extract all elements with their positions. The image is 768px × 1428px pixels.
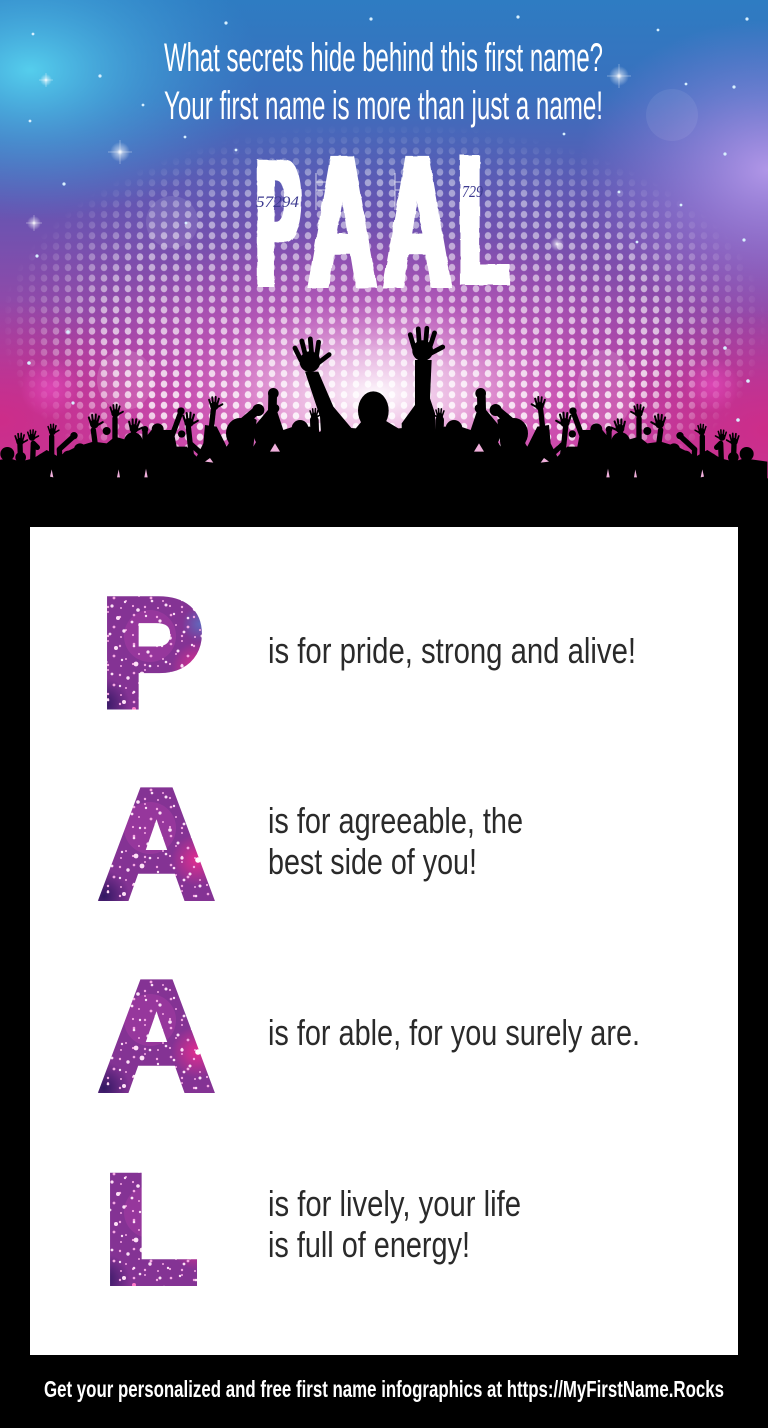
description A first: best side of you! — [268, 841, 477, 882]
crowd silhouette — [0, 328, 768, 528]
sparkles — [26, 15, 750, 422]
description P: is for pride, strong and alive! — [268, 630, 636, 671]
name title PAAL: A — [309, 115, 376, 329]
name title PAAL: A — [384, 115, 451, 329]
letter P: P — [102, 568, 202, 736]
description A first — [268, 800, 523, 882]
letter A: A — [99, 758, 214, 930]
name title PAAL: L — [458, 114, 508, 325]
concert background scene — [0, 0, 768, 478]
description L — [268, 1183, 521, 1265]
letter A second: A — [99, 950, 214, 1122]
description L: is full of energy! — [268, 1224, 470, 1265]
name title PAAL: 729 — [462, 182, 483, 201]
central figure with raised hands — [294, 328, 443, 443]
name title PAAL: P — [257, 121, 300, 327]
letter L: L — [105, 1145, 197, 1313]
name title PAAL: 57294 — [256, 194, 299, 211]
name title PAAL — [256, 114, 508, 329]
white content panel — [30, 527, 738, 1355]
description A second: is for able, for you surely are. — [268, 1012, 640, 1053]
description A first: is for agreeable, the — [268, 800, 523, 841]
description L: is for lively, your life — [268, 1183, 521, 1224]
